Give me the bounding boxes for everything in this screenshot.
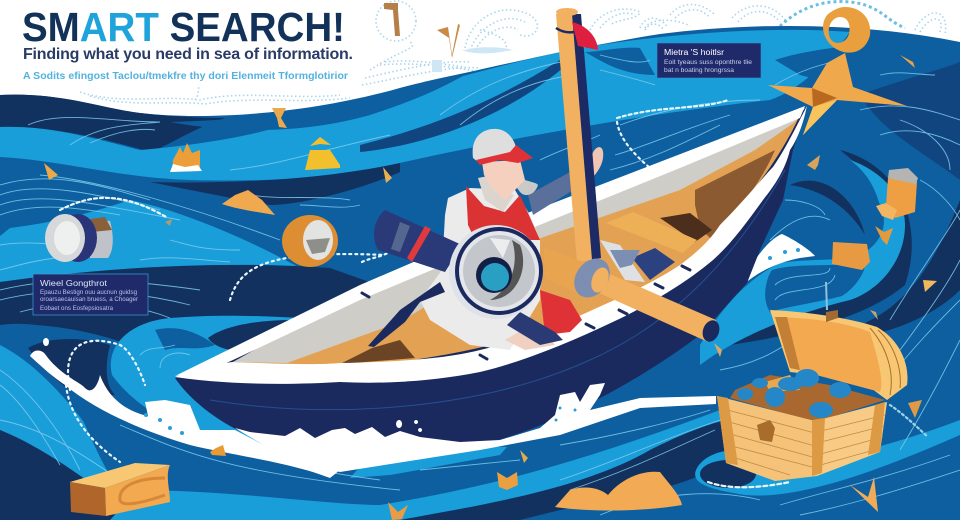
lock — [757, 420, 775, 442]
small fin dash — [165, 219, 172, 226]
floating objects right — [388, 55, 937, 520]
mast top — [556, 8, 578, 16]
mast — [556, 8, 601, 262]
lower left navy band — [0, 265, 420, 345]
blue balls — [737, 369, 851, 418]
crate top — [70, 463, 170, 488]
left notch in band — [585, 48, 655, 75]
wheel brown cap — [90, 217, 112, 232]
title: SMART SEARCH! — [22, 4, 345, 50]
wheel navy band — [59, 214, 97, 262]
navy cloth — [632, 248, 675, 280]
callout body: Eoit tyeaus suss oponthre tlie — [664, 60, 753, 66]
route chest right — [890, 405, 928, 437]
shirt — [420, 188, 540, 350]
small fin left — [44, 163, 58, 180]
foam blob by hull — [145, 400, 285, 456]
wheel rear block — [90, 219, 113, 258]
chest lid — [770, 310, 908, 400]
route lower left — [66, 385, 120, 462]
foam right splash under bow — [743, 234, 815, 285]
callout body second line: bat n boating hrongrssa — [664, 68, 735, 74]
mast navy side — [570, 14, 601, 260]
route from boat to left — [362, 252, 390, 262]
tail fin top — [272, 108, 287, 128]
spool wheel — [45, 214, 113, 262]
telescope band gray — [391, 222, 410, 252]
lid inner shadow — [775, 317, 800, 370]
oar — [544, 240, 722, 344]
interior dark left floor — [340, 340, 415, 364]
gold bell — [305, 137, 340, 170]
orange ring wheel — [282, 215, 338, 267]
tagline: A Sodits efingost Taclou/tmekfre thy dori Elenmeit Tformglotirior — [23, 70, 348, 82]
lid inner — [775, 317, 881, 392]
subtitle: Finding what you need in sea of information. — [23, 46, 353, 63]
callout body: Epauzu Bestign ouu aucnun guidsg — [40, 290, 137, 296]
flag — [572, 22, 598, 50]
bottom small boat — [210, 445, 226, 456]
sand rock — [222, 190, 275, 215]
chest front face — [717, 396, 817, 481]
lid ribs — [870, 328, 900, 395]
lens shadow — [490, 240, 523, 300]
interior dark floor — [660, 213, 712, 242]
crate grid side — [70, 482, 106, 516]
chest — [717, 282, 908, 481]
wheel inner — [54, 221, 80, 255]
centre light arc — [111, 316, 300, 443]
cap brim — [476, 145, 533, 165]
top navy wave — [0, 95, 225, 152]
interior — [233, 115, 800, 368]
cup box — [886, 178, 917, 218]
route upper left — [60, 198, 168, 218]
foam band under hull — [235, 383, 716, 472]
hull — [175, 108, 807, 450]
wheel face — [45, 214, 85, 262]
far gunwale white — [175, 106, 805, 376]
cup lid — [888, 168, 918, 184]
crate box — [832, 242, 870, 270]
fin near oar — [714, 343, 722, 357]
medium arch inside ribbon — [765, 262, 865, 312]
grey block — [610, 250, 640, 268]
fin bottom left — [388, 502, 408, 520]
eye ring — [476, 257, 512, 293]
hull stripe — [210, 170, 785, 410]
anchor ring — [823, 7, 870, 53]
route to orange ring — [230, 254, 385, 300]
lower left medium band — [0, 324, 130, 410]
small fin 2 — [875, 226, 893, 245]
panel: left callout — [33, 274, 148, 315]
navy streak middle — [150, 163, 400, 205]
right lower navy — [860, 62, 960, 180]
lower left light wave — [0, 345, 114, 478]
cuff and hand — [582, 147, 603, 178]
foam drops — [396, 420, 422, 432]
mast orange side — [556, 14, 592, 262]
collar — [478, 176, 514, 212]
mid left light wave — [0, 200, 300, 282]
thwart — [606, 212, 697, 253]
bottom navy band — [400, 420, 730, 520]
lower left navy corner — [0, 430, 140, 520]
fin upper right — [900, 55, 915, 68]
foam around hull — [235, 383, 716, 472]
rod handle — [368, 282, 445, 347]
ring face — [303, 220, 333, 260]
chest slats — [720, 408, 885, 475]
sketch wave solid — [432, 47, 512, 72]
far gunwale gray — [233, 108, 805, 363]
crown foam — [170, 164, 202, 172]
lens inner rim — [459, 231, 539, 311]
bottom light ribbon — [110, 410, 730, 520]
ring body — [282, 215, 338, 267]
callout body third line: Eobaet ons Eosfepsiosatra — [40, 306, 114, 312]
navy crescent right — [790, 181, 865, 235]
oar cap — [700, 318, 722, 344]
crate right side — [105, 465, 170, 516]
crown — [172, 143, 200, 172]
cup lower tab — [876, 203, 897, 220]
floating objects left — [44, 108, 392, 516]
dotted routes — [60, 100, 928, 487]
callout body second line: oroarsaecauisan bruess, a Choager — [40, 297, 138, 303]
eye iris — [481, 263, 509, 291]
anchor star arms — [768, 53, 907, 135]
vest — [466, 186, 540, 250]
crate handle — [120, 478, 165, 504]
chest hasp — [826, 310, 838, 322]
beard — [510, 175, 538, 195]
mast band — [556, 28, 574, 32]
lens glass — [463, 235, 535, 307]
fin center — [870, 310, 878, 320]
sky dotted arc — [765, 2, 905, 45]
foam left crest — [30, 350, 340, 478]
lens white reflection — [490, 238, 510, 258]
sketch glyphs top — [384, 3, 460, 58]
origami bird — [850, 477, 878, 512]
foam drop — [43, 338, 49, 346]
red lower clothes — [540, 290, 582, 335]
gold pieces — [765, 375, 800, 392]
anchor dark facet — [812, 88, 837, 107]
grey bracket — [600, 240, 645, 282]
anchor — [768, 7, 907, 135]
right navy band — [730, 150, 912, 345]
navy streak top centre — [360, 60, 570, 152]
glove — [507, 312, 563, 345]
route left swirl — [68, 341, 145, 390]
arm — [528, 160, 592, 215]
small fin 3 — [923, 280, 937, 292]
small fin mid — [383, 167, 392, 183]
medium patch in arc — [155, 328, 215, 350]
rowlock collar — [567, 252, 617, 304]
sky sketch decorations — [80, 1, 946, 104]
lower right light ribbon — [695, 420, 960, 496]
route down right — [617, 122, 650, 168]
oar shaft left — [544, 248, 600, 300]
light hill under hull — [350, 447, 507, 478]
telescope tube — [374, 210, 462, 272]
mid right medium — [720, 250, 960, 474]
right medium wave — [775, 43, 960, 170]
near gunwale — [175, 106, 807, 384]
ring inner — [306, 238, 330, 254]
right light ribbon — [700, 160, 905, 365]
telescope band red — [407, 226, 431, 262]
fisherman — [420, 129, 603, 350]
chest contents — [730, 375, 885, 422]
boat — [175, 106, 807, 450]
whirl hole — [28, 339, 115, 395]
right bottom navy corner — [680, 440, 960, 520]
foam dots — [144, 248, 800, 435]
lens navy ring — [455, 227, 543, 315]
callout heading: Wieel Gongthrot — [40, 278, 108, 288]
chest right face — [815, 402, 887, 476]
cap dome — [473, 129, 516, 162]
small fin 4 — [908, 400, 922, 418]
telescope and magnifier — [368, 210, 543, 347]
mid right navy swoosh — [800, 200, 960, 341]
foam left — [30, 234, 815, 478]
oar shaft right — [588, 268, 716, 342]
small fin bottom — [520, 450, 528, 463]
main upper light band — [0, 30, 850, 181]
small crate bottom — [497, 472, 518, 490]
route chest — [708, 482, 790, 487]
forearm — [505, 325, 555, 350]
foam medium band — [70, 395, 960, 520]
sketch letter one — [384, 3, 400, 36]
bottom left crate — [70, 463, 170, 516]
route upper right — [617, 100, 728, 118]
navy ellipse by boat tip — [208, 320, 292, 350]
small fin 1 — [807, 155, 820, 170]
face — [482, 160, 525, 200]
panel: top right callout — [657, 43, 761, 78]
collar inner — [588, 265, 612, 295]
medium streak upper — [170, 72, 470, 130]
rivets — [362, 266, 690, 359]
ribbon hole — [700, 460, 756, 488]
anchor light lower — [803, 100, 837, 135]
bottom rock — [555, 472, 682, 511]
lens rim — [449, 225, 543, 319]
chain — [826, 282, 827, 310]
sketch letter two — [437, 24, 460, 58]
straps — [717, 396, 885, 476]
interior back brown — [695, 150, 775, 240]
callout heading: Mietra 'S hoitlsr — [664, 48, 724, 57]
